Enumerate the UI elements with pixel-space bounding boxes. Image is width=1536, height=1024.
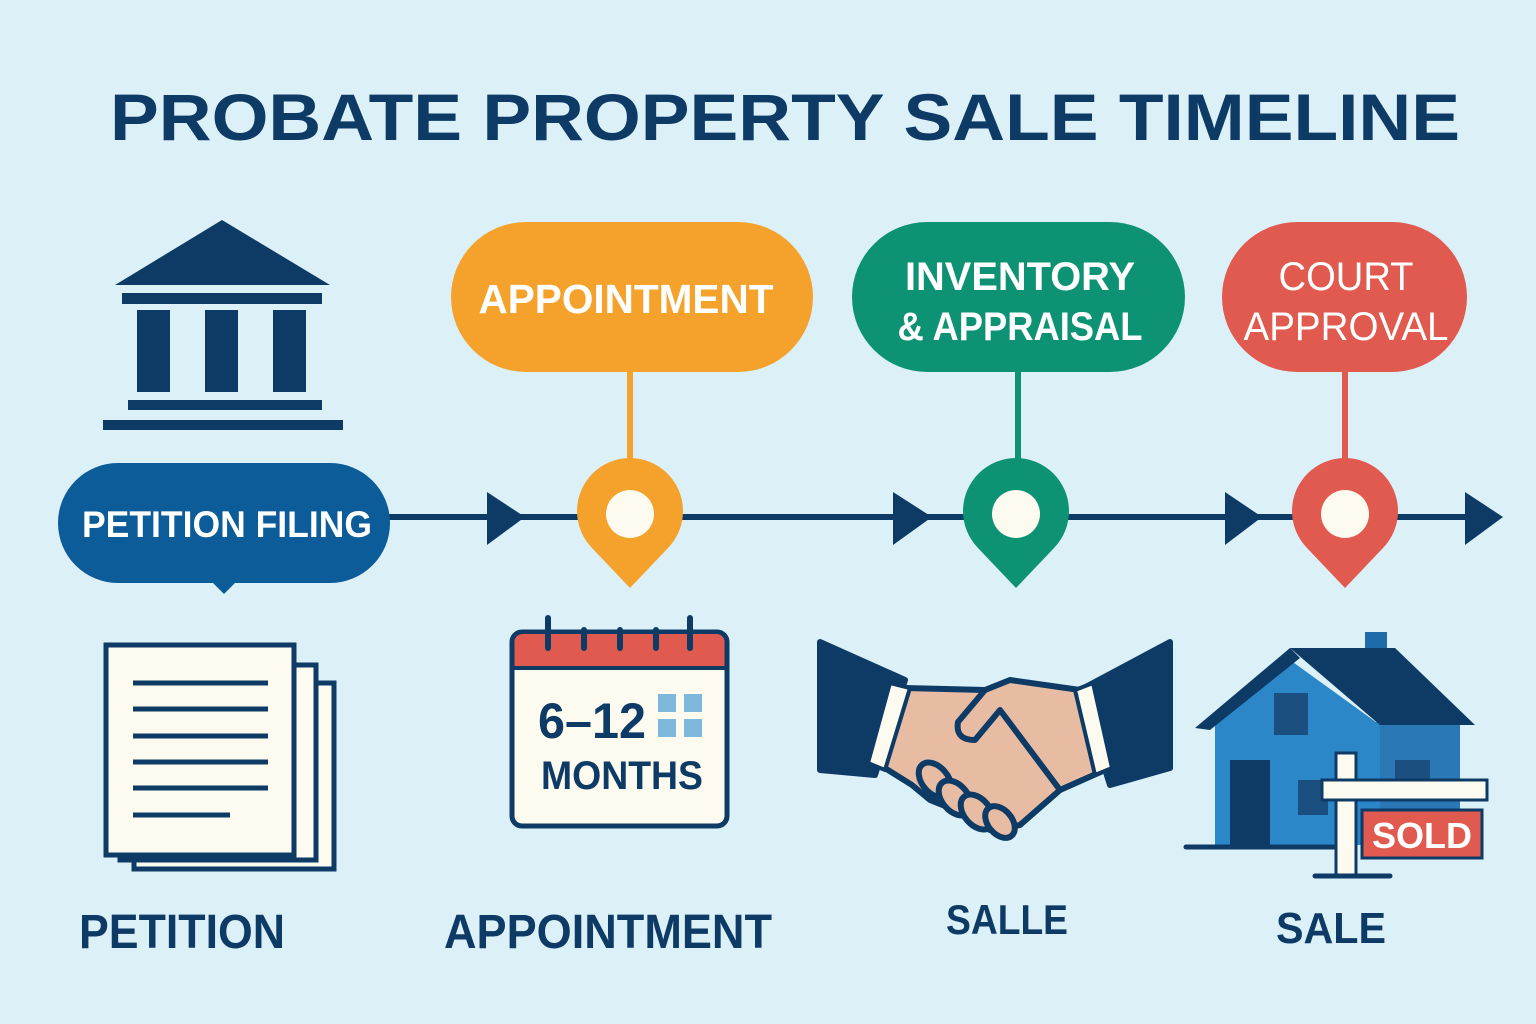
icon: calendar 6-12 months: 6–12 xyxy=(538,693,646,749)
label: petition: PETITION xyxy=(79,906,285,959)
icon: house with sold sign: SOLD xyxy=(1372,815,1472,856)
pill: petition filing xyxy=(58,463,390,594)
bubble: inventory & appraisal: & APPRAISAL xyxy=(898,305,1142,349)
bubble: inventory & appraisal xyxy=(852,222,1185,465)
bubble: appointment: APPOINTMENT xyxy=(478,276,774,322)
icon: calendar 6-12 months xyxy=(512,618,727,826)
icon: house with sold sign xyxy=(1186,632,1487,876)
icon: handshake xyxy=(820,642,1170,844)
icon: calendar 6-12 months: MONTHS xyxy=(541,754,703,798)
pill: petition filing: PETITION FILING xyxy=(82,504,372,545)
bubble: court approval xyxy=(1222,222,1467,465)
label: appointment: APPOINTMENT xyxy=(444,906,772,959)
bubble: appointment xyxy=(451,222,813,465)
title: PROBATE PROPERTY SALE TIMELINE xyxy=(110,80,1460,154)
icon: document pages xyxy=(106,645,334,869)
bubble: court approval: COURT xyxy=(1278,255,1414,299)
pin: red xyxy=(1292,458,1398,588)
label: salle: SALLE xyxy=(946,896,1068,943)
icon: courthouse xyxy=(103,220,343,430)
pin: orange xyxy=(577,458,683,588)
timeline line with arrows xyxy=(385,492,1503,545)
pin: green xyxy=(963,458,1069,588)
bubble: inventory & appraisal: INVENTORY xyxy=(905,255,1135,299)
bubble: court approval: APPROVAL xyxy=(1244,305,1448,349)
label: sale: SALE xyxy=(1276,904,1386,953)
